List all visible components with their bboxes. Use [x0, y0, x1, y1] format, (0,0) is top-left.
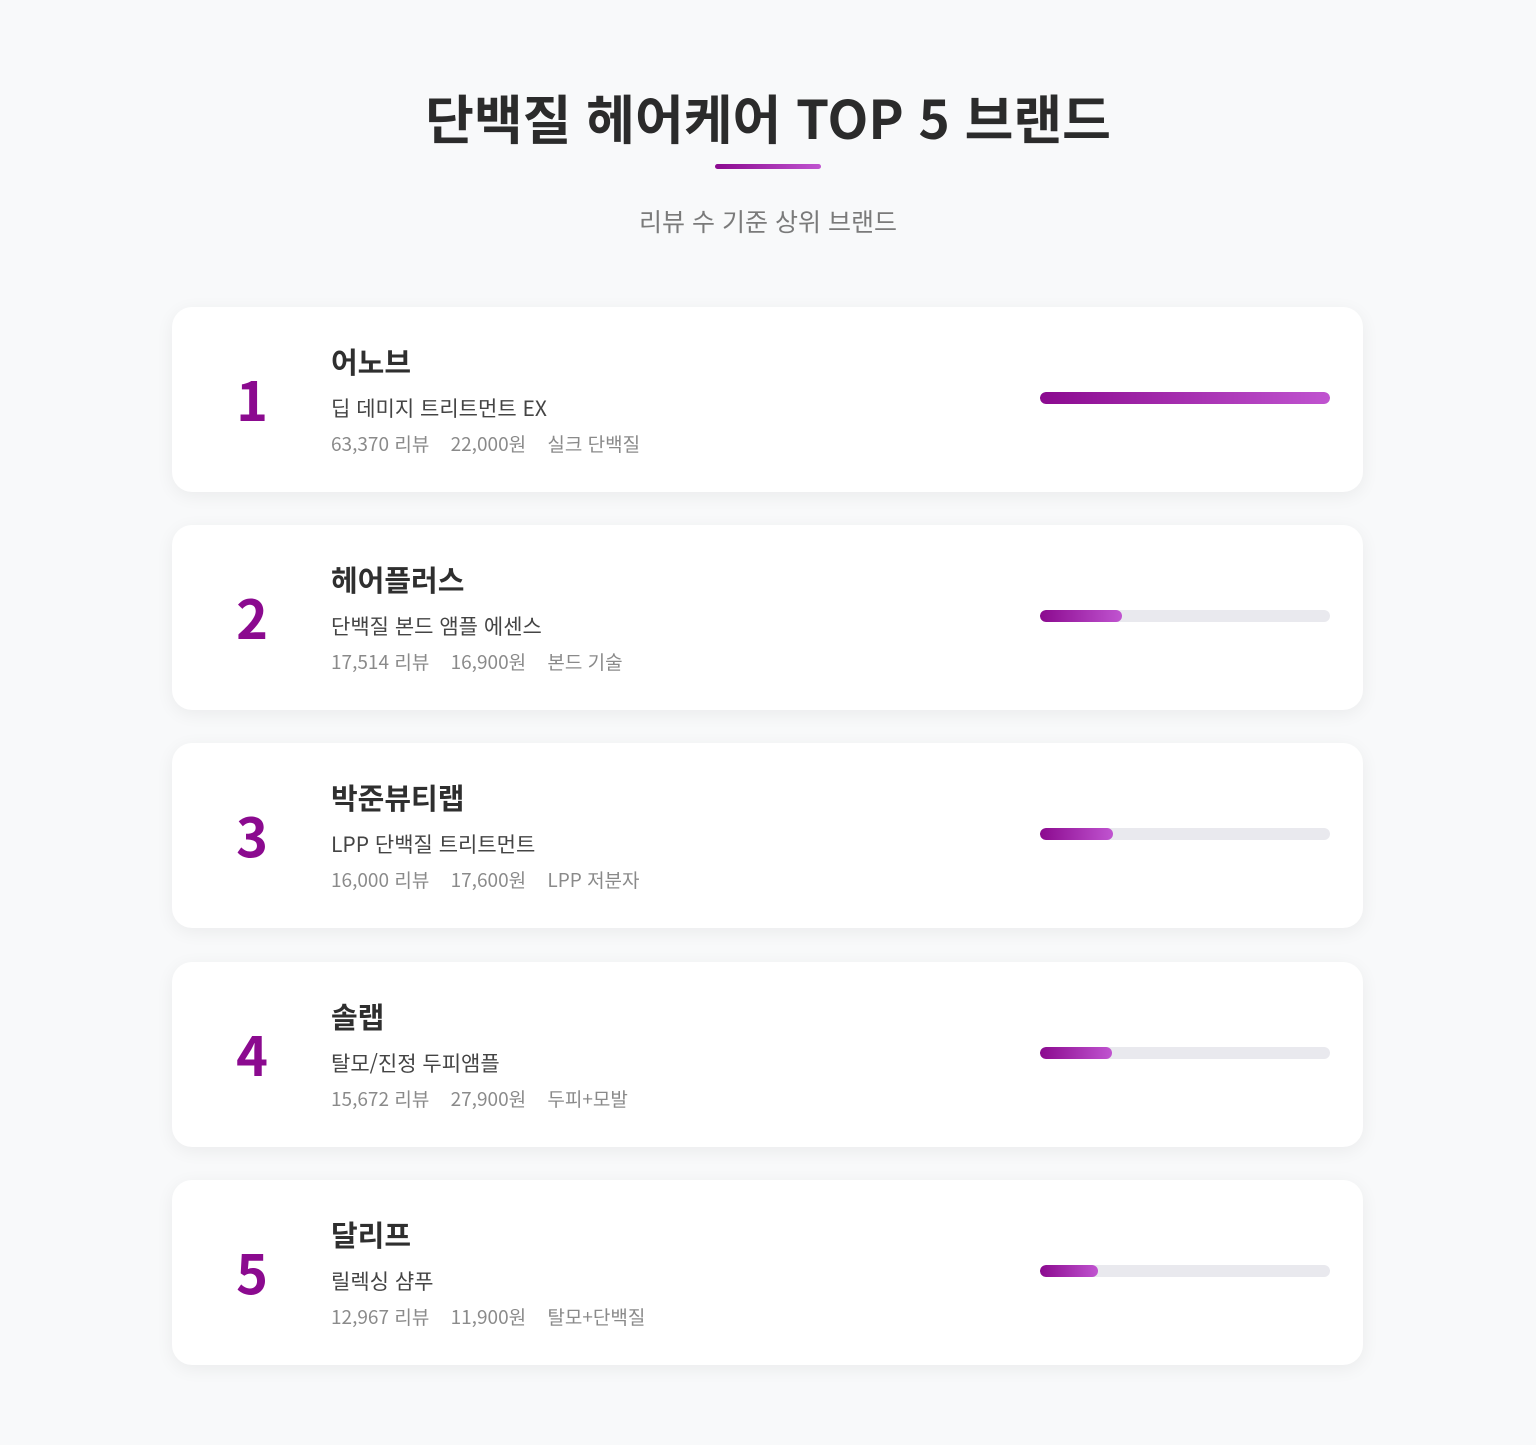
rank number: 5: [236, 1231, 268, 1310]
bar: [1040, 1265, 1330, 1277]
product: LPP 단백질 트리트먼트: [331, 829, 535, 859]
product: 딥 데미지 트리트먼트 EX: [331, 393, 547, 423]
card: rank 4: [172, 962, 1363, 1147]
card: rank 2: [172, 525, 1363, 710]
meta: 12,967 리뷰 11,900원 탈모+단백질: [331, 1303, 645, 1330]
brand name: 어노브: [331, 340, 411, 382]
subtitle: 리뷰 수 기준 상위 브랜드: [639, 203, 897, 239]
rank number: 3: [236, 794, 268, 873]
title underline: [715, 164, 821, 169]
product: 단백질 본드 앰플 에센스: [331, 611, 542, 641]
bar: [1040, 828, 1330, 840]
rank number: 1: [236, 358, 268, 437]
rank number: 2: [236, 576, 268, 655]
meta: 17,514 리뷰 16,900원 본드 기술: [331, 648, 623, 675]
product: 릴렉싱 샴푸: [331, 1266, 433, 1296]
brand name: 솔랩: [331, 995, 384, 1037]
title: 단백질 헤어케어 TOP 5 브랜드: [425, 79, 1111, 155]
card: rank 3: [172, 743, 1363, 928]
meta: 16,000 리뷰 17,600원 LPP 저분자: [331, 866, 640, 893]
brand name: 박준뷰티랩: [331, 776, 464, 818]
meta: 63,370 리뷰 22,000원 실크 단백질: [331, 430, 640, 457]
card: rank 5: [172, 1180, 1363, 1365]
product: 탈모/진정 두피앰플: [331, 1048, 500, 1078]
meta: 15,672 리뷰 27,900원 두피+모발: [331, 1085, 628, 1112]
bar: [1040, 610, 1330, 622]
brand name: 헤어플러스: [331, 558, 464, 600]
card: rank 1: [172, 307, 1363, 492]
brand name: 달리프: [331, 1213, 411, 1255]
bar: [1040, 392, 1330, 404]
bar: [1040, 1047, 1330, 1059]
rank number: 4: [236, 1013, 268, 1092]
